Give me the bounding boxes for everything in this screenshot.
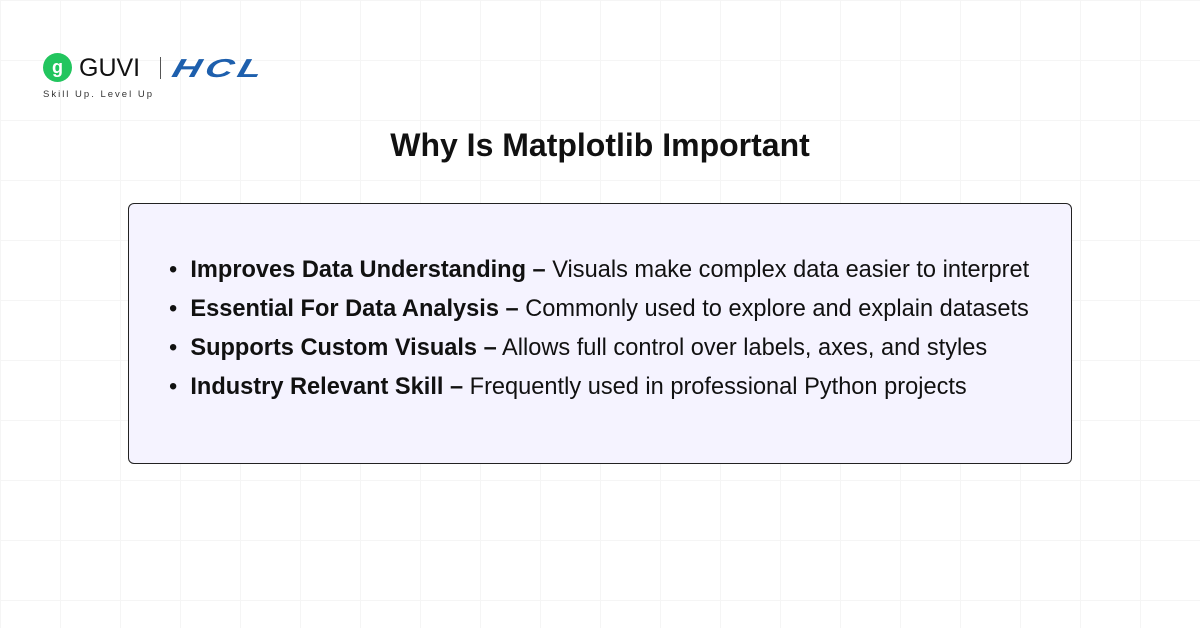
guvi wordmark: GUVI [79, 54, 140, 82]
title: Why Is Matplotlib Important [390, 127, 810, 163]
icon: guvi circle: g [52, 57, 63, 77]
logo [43, 53, 271, 100]
bullet list: • Industry Relevant Skill – Frequently used in professional Python projects [169, 374, 967, 400]
icon: guvi circle [43, 53, 72, 82]
bullet list: • Improves Data Understanding – Visuals make complex data easier to interpret [169, 257, 1029, 283]
hcl wordmark: HCL [169, 53, 271, 83]
bullet list: • Essential For Data Analysis – Commonly used to explore and explain datasets [169, 296, 1029, 322]
bullet list [169, 257, 1029, 400]
panel: list [128, 203, 1072, 464]
bullet list: • Supports Custom Visuals – Allows full control over labels, axes, and styles [169, 335, 987, 361]
tagline: Skill Up. Level Up [43, 89, 154, 100]
